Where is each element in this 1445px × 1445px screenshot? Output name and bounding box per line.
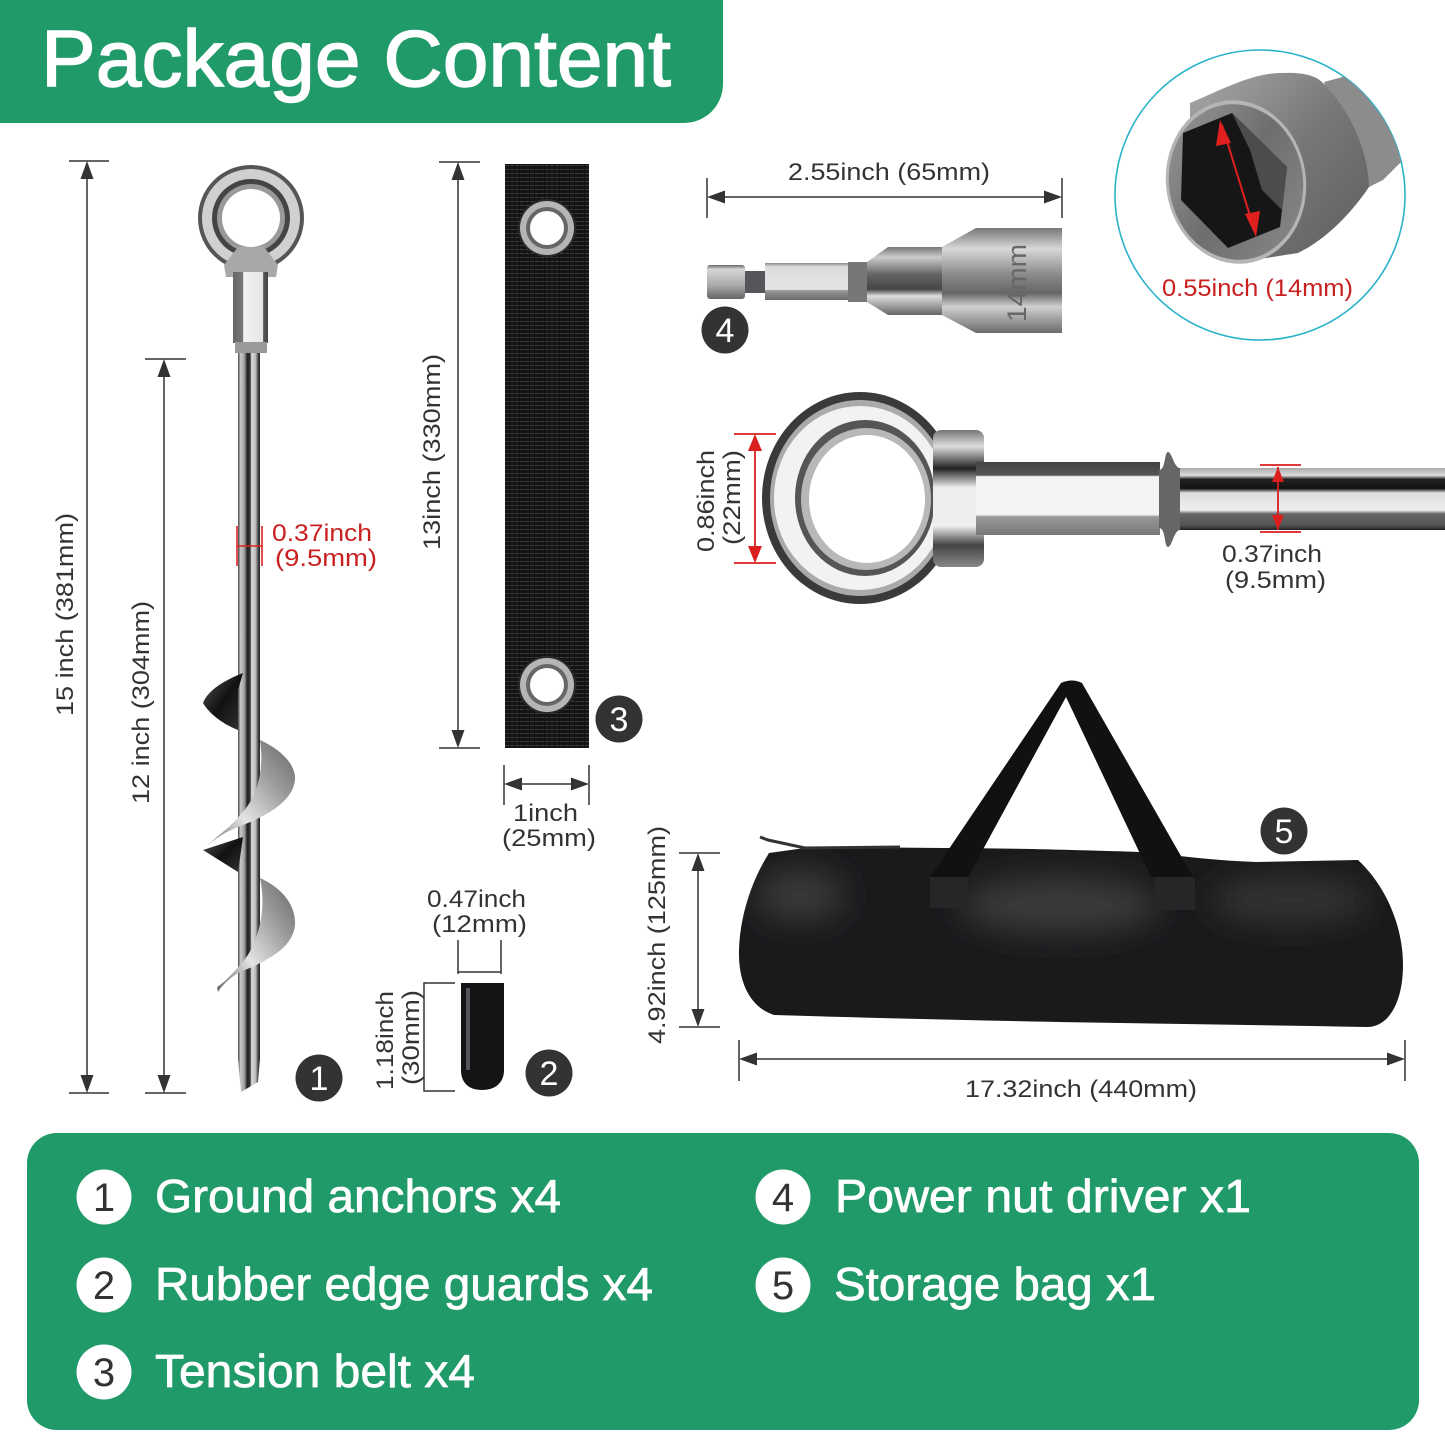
- dimension: shaft diameter: [237, 520, 377, 572]
- dimension: guard width: 0.47inch: [427, 886, 526, 913]
- number badge 1: 1: [310, 1060, 328, 1098]
- list item 1: Ground anchors x4: [155, 1170, 561, 1222]
- dimension: belt length: 13inch (330mm): [419, 354, 446, 550]
- dimension: driver length: 2.55inch (65mm): [788, 159, 990, 186]
- list item 2: Rubber edge guards x4: [155, 1258, 653, 1310]
- panel: item list: [27, 1133, 1419, 1430]
- socket detail lens: [1115, 50, 1410, 340]
- number badge 5: [1260, 808, 1308, 854]
- number badge 1: [296, 1054, 342, 1102]
- dimension: guard height: [372, 983, 455, 1091]
- list item 3: Tension belt x4: [155, 1345, 475, 1397]
- dimension: bag length: 17.32inch (440mm): [965, 1076, 1197, 1103]
- list item 5: Storage bag x1: [834, 1258, 1156, 1310]
- dimension: ring diameter: [693, 434, 776, 563]
- power nut driver illustration: 14mm: [1002, 244, 1032, 322]
- title: Package Content: [41, 14, 671, 103]
- list item 4: Power nut driver x1: [835, 1170, 1251, 1222]
- dimension: bag height: 4.92inch (125mm): [644, 826, 671, 1044]
- list item 1: 1: [93, 1176, 115, 1220]
- dimension: shaft close-up: 0.37inch: [1222, 541, 1322, 568]
- dimension: bag height: [644, 826, 720, 1044]
- number badge 4: 4: [716, 312, 734, 350]
- dimension: belt width: [502, 765, 596, 852]
- dimension: belt width: (25mm): [502, 825, 596, 852]
- dimension: screw length 12 inch: 12 inch (304mm): [128, 601, 155, 804]
- power nut driver illustration: [707, 228, 1062, 333]
- dimension: anchor length 15 inch: 15 inch (381mm): [52, 513, 79, 716]
- number badge 2: 2: [540, 1055, 558, 1093]
- title banner: [0, 0, 723, 123]
- rubber edge guard illustration: [461, 983, 504, 1090]
- dimension: guard width: (12mm): [432, 911, 527, 938]
- number badge 3: [596, 696, 642, 742]
- number badge 5: 5: [1275, 813, 1293, 851]
- dimension: guard width: [427, 886, 527, 974]
- list item 5: 5: [772, 1264, 794, 1308]
- number badge 3: 3: [610, 701, 628, 739]
- list item 3: 3: [93, 1351, 115, 1395]
- dimension: belt width: 1inch: [513, 800, 578, 827]
- dimension: ring diameter: 0.86inch: [693, 450, 720, 552]
- dimension: ring diameter: (22mm): [719, 450, 746, 545]
- number badge 2: [526, 1050, 572, 1096]
- list item 4: 4: [772, 1176, 794, 1220]
- ground anchor illustration: [198, 165, 304, 1092]
- dimension: shaft close-up: (9.5mm): [1225, 567, 1326, 594]
- lens label: 0.55inch (14mm): [1162, 275, 1353, 302]
- dimension: guard height: 1.18inch: [372, 991, 399, 1090]
- eye bolt close-up illustration: [762, 392, 1445, 604]
- dimension: shaft close-up: [1222, 465, 1326, 594]
- dimension: shaft diameter: 0.37inch: [272, 520, 372, 547]
- list item 2: 2: [93, 1264, 115, 1308]
- dimension: guard height: (30mm): [398, 990, 425, 1085]
- dimension: shaft diameter: (9.5mm): [275, 545, 377, 572]
- number badge 4: [702, 306, 748, 354]
- storage bag illustration: [739, 680, 1403, 1027]
- tension belt illustration: [505, 164, 589, 748]
